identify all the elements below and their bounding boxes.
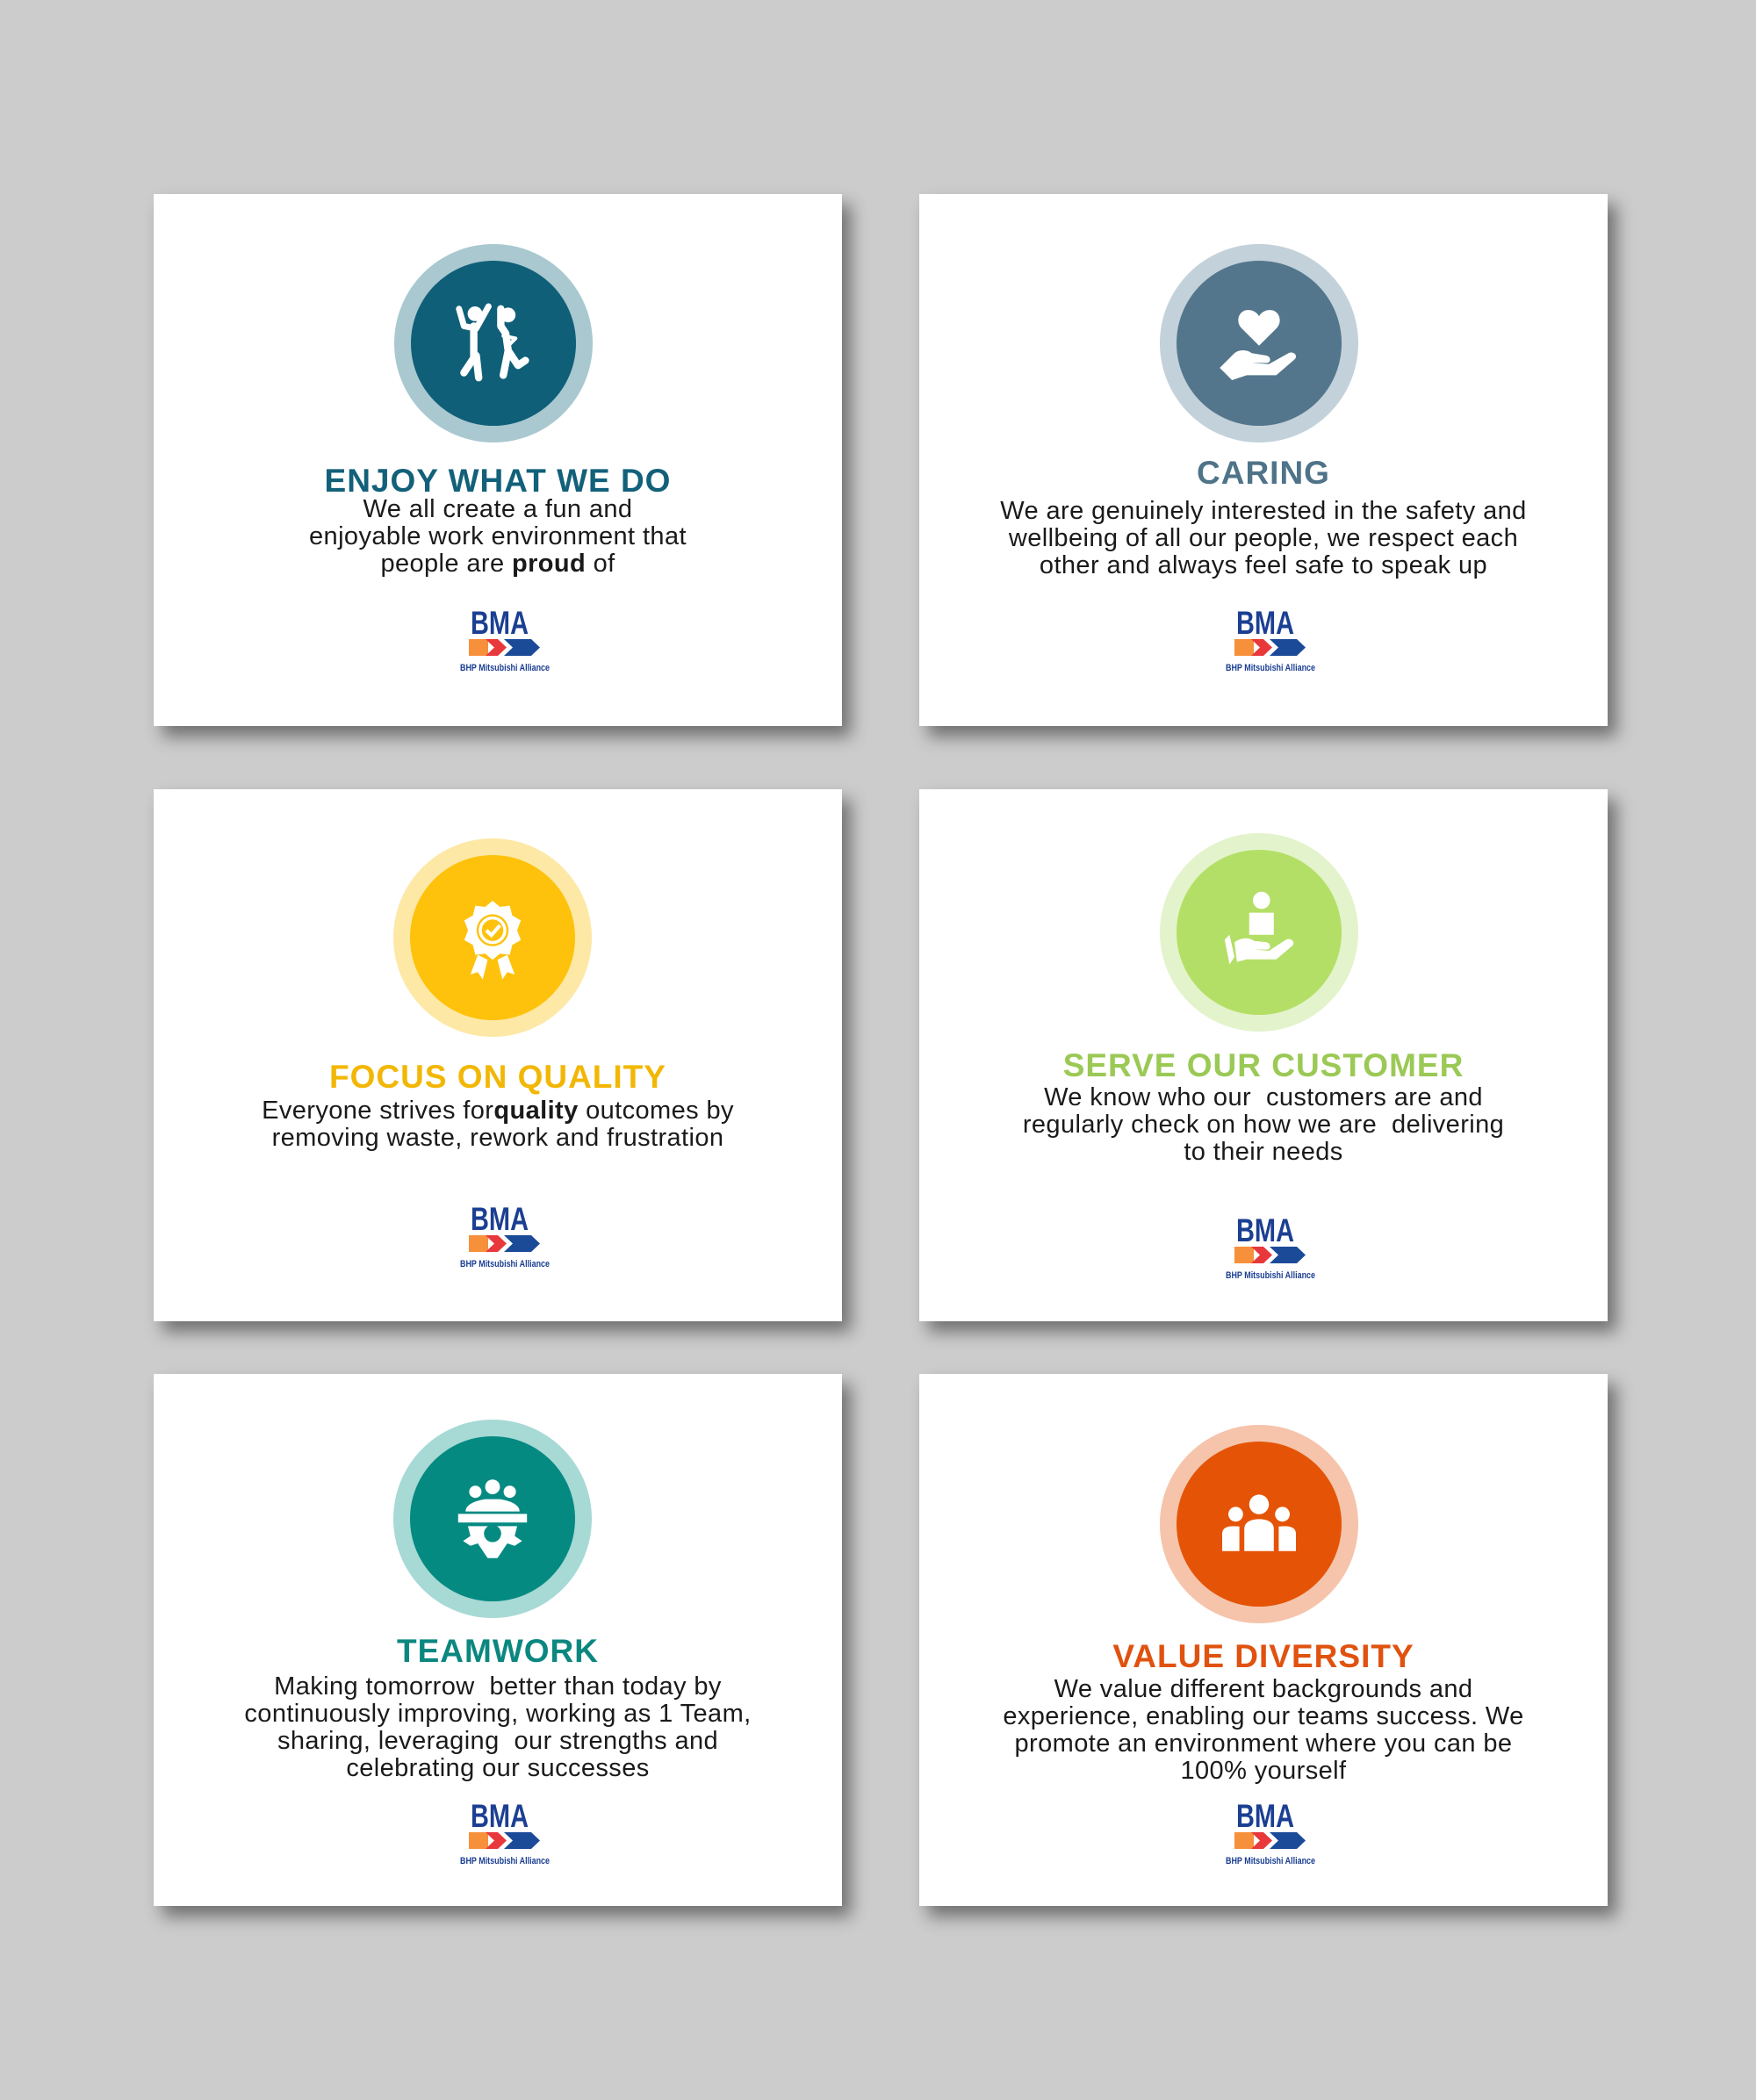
logo: BMA [460,608,550,673]
text block: experience, enabling our teams success. We [1003,1702,1524,1730]
text block: removing waste, rework and frustration [272,1124,723,1152]
text block: celebrating our successes [346,1754,650,1782]
text block [1000,497,1527,579]
heading: FOCUS ON QUALITY [329,1059,666,1095]
text block: to their needs [1184,1138,1343,1166]
text block: Making tomorrow better than today by [274,1672,722,1701]
panel: serve our customer [919,789,1608,1321]
text block: enjoyable work environment that [309,522,687,550]
text block: continuously improving, working as 1 Team, [244,1700,752,1728]
text block [244,1672,752,1782]
text block: wellbeing of all our people, we respect each [1009,524,1518,552]
text block: promote an environment where you can be [1015,1730,1512,1758]
icon: dancing people [394,244,593,442]
panel: value diversity [919,1374,1608,1906]
logo: BMA [460,1802,550,1866]
text block: other and always feel safe to speak up [1040,551,1487,579]
text block: Everyone strives forquality outcomes by [262,1097,734,1125]
text block: 100% yourself [1180,1757,1346,1785]
panel: teamwork [154,1374,842,1906]
heading: SERVE OUR CUSTOMER [1063,1047,1464,1083]
text block: We are genuinely interested in the safety and [1000,497,1527,525]
heading: TEAMWORK [397,1633,599,1669]
panel: focus on quality [154,789,842,1321]
panel: caring [919,194,1608,726]
text block: We know who our customers are and [1044,1083,1483,1111]
text block: regularly check on how we are delivering [1023,1111,1504,1139]
text block: We value different backgrounds and [1054,1675,1472,1703]
text block [309,495,687,578]
logo: BMA [460,1205,550,1269]
text block: people are proud of [380,550,615,578]
logo: BMA [1226,1802,1315,1866]
icon: quality rosette [393,838,592,1037]
text block: We all create a fun and [363,495,632,523]
heading: ENJOY WHAT WE DO [325,463,671,499]
icon: hand holding person [1160,833,1358,1032]
text block [1003,1675,1524,1785]
panel: enjoy what we do [154,194,842,726]
logo: BMA [1226,608,1315,673]
heading: VALUE DIVERSITY [1112,1638,1414,1674]
heading: CARING [1197,455,1330,491]
text block: sharing, leveraging our strengths and [277,1727,718,1755]
text block [262,1097,734,1152]
icon: team gear [393,1420,592,1618]
icon: group of people [1160,1425,1358,1623]
icon: heart in hand [1160,244,1358,442]
text block [1023,1083,1504,1166]
logo: BMA [1226,1216,1315,1281]
